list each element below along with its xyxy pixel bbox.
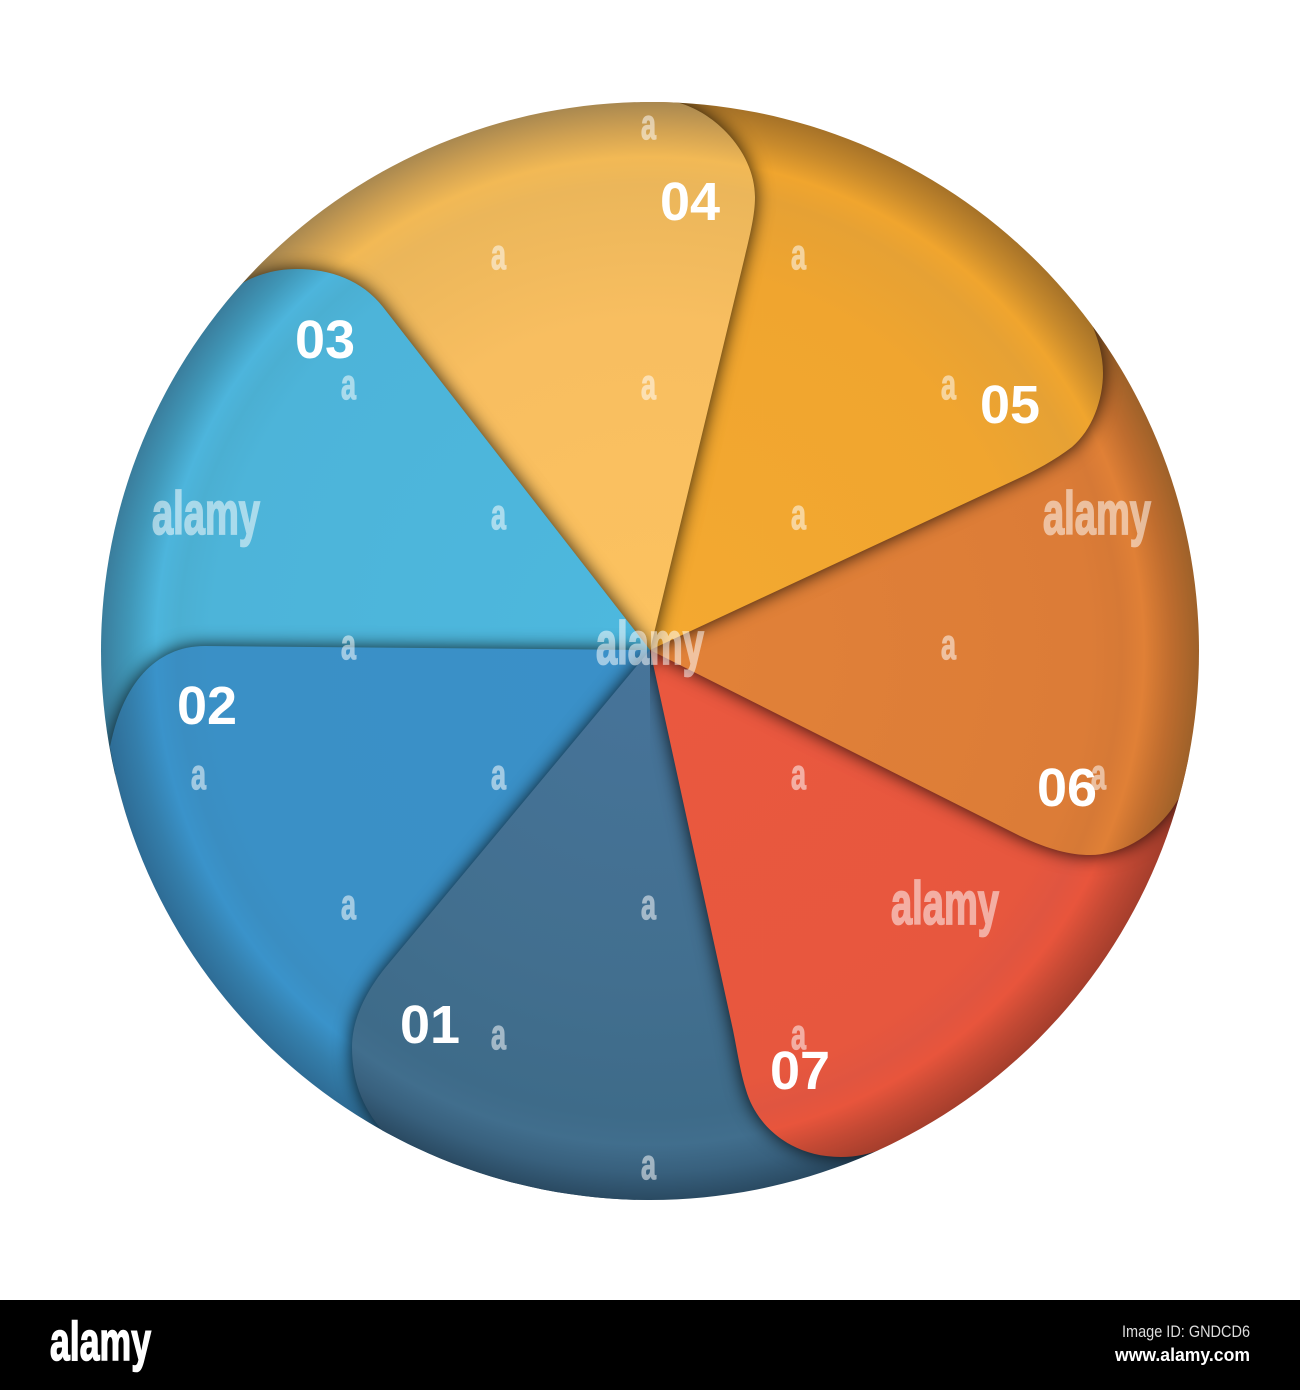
number 04: 04 [660,172,720,232]
footer logo: alamy [50,1310,151,1372]
segment 06: orange [650,325,1202,855]
pie chart [98,100,1202,1204]
watermark small letters: a [491,1011,507,1059]
watermark small letters: a [641,1141,657,1189]
watermark small letters: a [791,1011,807,1059]
watermark small letters: a [491,751,507,799]
watermark small letters: a [341,881,357,929]
watermark small letters: a [191,751,207,799]
number 05: 05 [980,375,1040,435]
image id: Image ID: GNDCD6 [1122,1322,1250,1341]
watermark small letters: a [641,101,657,149]
segment 01 base: dark slate blue [352,650,880,1204]
number 06: 06 [1037,758,1097,818]
number 02: 02 [177,676,237,736]
watermark words: alamy [596,610,704,677]
number 03: 03 [295,310,355,370]
watermark small letters: a [791,231,807,279]
segment 01 overlap on segment 02 [338,642,650,1200]
watermark small letters: a [641,361,657,409]
watermark small letters: a [941,621,957,669]
watermark small letters: a [641,881,657,929]
watermark words: alamy [152,480,260,547]
footer bar [0,1300,1300,1390]
number 07: 07 [770,1041,830,1101]
watermark small letters: a [491,231,507,279]
watermark words: alamy [1043,480,1151,547]
watermark small letters [191,101,1107,1189]
watermark small letters: a [1091,751,1107,799]
segment 04: light yellow [225,100,755,650]
number 01: 01 [400,995,460,1055]
watermark words: alamy [891,870,999,937]
segment 03: light blue [98,269,650,775]
website: www.alamy.com [1114,1345,1250,1365]
segment 07: red [650,650,1192,1157]
watermark small letters: a [341,621,357,669]
segment 05: amber [640,100,1103,650]
watermark small letters: a [791,751,807,799]
segment 02: mid blue [110,646,650,1158]
watermark small letters: a [941,361,957,409]
watermark small letters: a [491,491,507,539]
watermark small letters: a [341,361,357,409]
watermark small letters: a [791,491,807,539]
watermark words [152,480,1151,937]
